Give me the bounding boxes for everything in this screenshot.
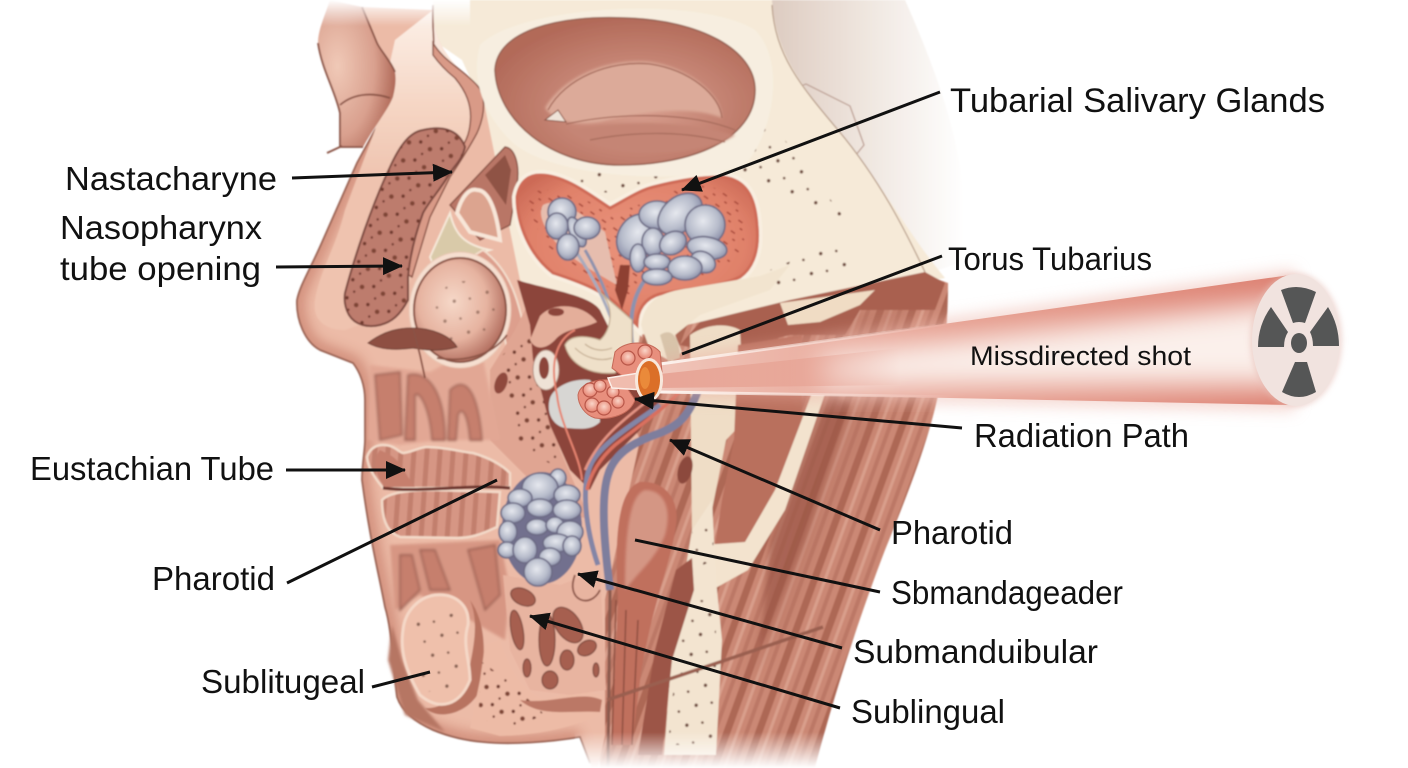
arrow: Submanduibular <box>578 574 842 648</box>
cheek tissue with dots <box>490 300 600 520</box>
label: Sbmandageader: Sbmandageader <box>891 574 1123 611</box>
label: Radiation Path: Radiation Path <box>974 417 1189 454</box>
label: Submanduibular: Submanduibular <box>853 633 1098 670</box>
label: Pharotid left <box>152 480 497 597</box>
turbinate ball <box>409 252 511 368</box>
orbit <box>477 9 773 176</box>
label: Torus Tubarius: Torus Tubarius <box>948 241 1152 277</box>
parotid blue gland <box>498 469 583 586</box>
beam pale core <box>820 300 1290 386</box>
neck muscles <box>590 272 948 768</box>
arrow: Sublingual <box>530 616 840 708</box>
leader: Sbmandageader <box>635 540 880 592</box>
label: Submanduibular <box>578 574 1098 670</box>
arrow: Nastacharyne <box>292 172 452 178</box>
label: Tubarial Salivary Glands: Tubarial Salivary Glands <box>950 82 1325 120</box>
label: Nastacharyne <box>65 160 452 197</box>
nasal sinus folds <box>430 147 528 400</box>
label: Eustachian Tube: Eustachian Tube <box>30 450 274 487</box>
beam cone <box>660 275 1290 405</box>
floor of mouth tissue <box>503 570 606 695</box>
arrow: Pharotid right <box>670 440 880 530</box>
arrow: Radiation Path <box>635 399 962 428</box>
radiation source disc <box>1250 273 1342 407</box>
tubarial gland pink capsule <box>517 175 758 325</box>
tubarial gland left lobes <box>546 198 622 352</box>
label: Torus Tubarius <box>682 241 1152 354</box>
nose bridge <box>315 5 484 330</box>
label: Pharotid left: Pharotid <box>152 560 275 597</box>
muscle arches above lip <box>368 345 500 445</box>
label: Nasopharynx tube opening: Nasopharynx <box>60 209 263 246</box>
diagonal platysma line <box>607 627 823 700</box>
label: Pharotid right <box>670 440 1013 551</box>
cream bone swirl <box>565 265 790 373</box>
leader: Pharotid left <box>287 480 497 583</box>
face skin <box>297 7 640 768</box>
label: Nastacharyne: Nastacharyne <box>65 160 277 197</box>
beam pink inner stripe <box>660 348 900 388</box>
label: Sublingual <box>530 616 1005 730</box>
anatomical cross-section of head and neck <box>297 0 965 768</box>
label: Nasopharynx tube opening: tube opening <box>60 250 261 287</box>
inner cavity <box>517 280 660 490</box>
label: Sublingual: Sublingual <box>851 693 1005 730</box>
label: Radiation Path <box>635 399 1189 454</box>
muscle fans below lip <box>388 540 510 732</box>
chin lobe <box>402 595 484 714</box>
bottom fade <box>575 732 895 768</box>
label: Missdirected shot: Missdirected shot <box>970 341 1192 371</box>
arrow: tube opening <box>276 266 402 267</box>
lips <box>367 445 510 538</box>
arrow: Eustachian Tube <box>286 468 405 472</box>
nasal mucosa pad with dots <box>345 128 465 326</box>
top fade <box>300 0 470 26</box>
beam white edges <box>660 322 960 397</box>
label: Pharotid right: Pharotid <box>891 514 1013 551</box>
tumor lobes and orange target <box>578 343 663 418</box>
tubarial gland right lobes <box>609 185 729 345</box>
beam glow <box>660 270 1295 410</box>
bone region <box>433 0 945 355</box>
neck spine bands <box>638 325 828 755</box>
leader: Sublitugeal <box>372 672 430 687</box>
label: Tubarial Salivary Glands <box>682 82 1325 190</box>
vessels running down neck <box>585 385 700 768</box>
arrow: Tubarial Salivary Glands <box>682 92 940 190</box>
radiation symbol <box>1258 287 1339 397</box>
radiation beam <box>660 270 1342 410</box>
eye socket skin <box>318 0 396 153</box>
label: Nasopharynx tube opening <box>60 209 402 287</box>
nostril <box>368 328 507 378</box>
neck inner muscle <box>612 455 695 745</box>
lower jaw lobe with dots <box>470 640 602 736</box>
leader: Torus Tubarius <box>682 256 942 354</box>
label: Sublitugeal: Sublitugeal <box>201 663 365 700</box>
label: Sbmandageader <box>635 540 1123 611</box>
skull back region <box>745 0 965 290</box>
